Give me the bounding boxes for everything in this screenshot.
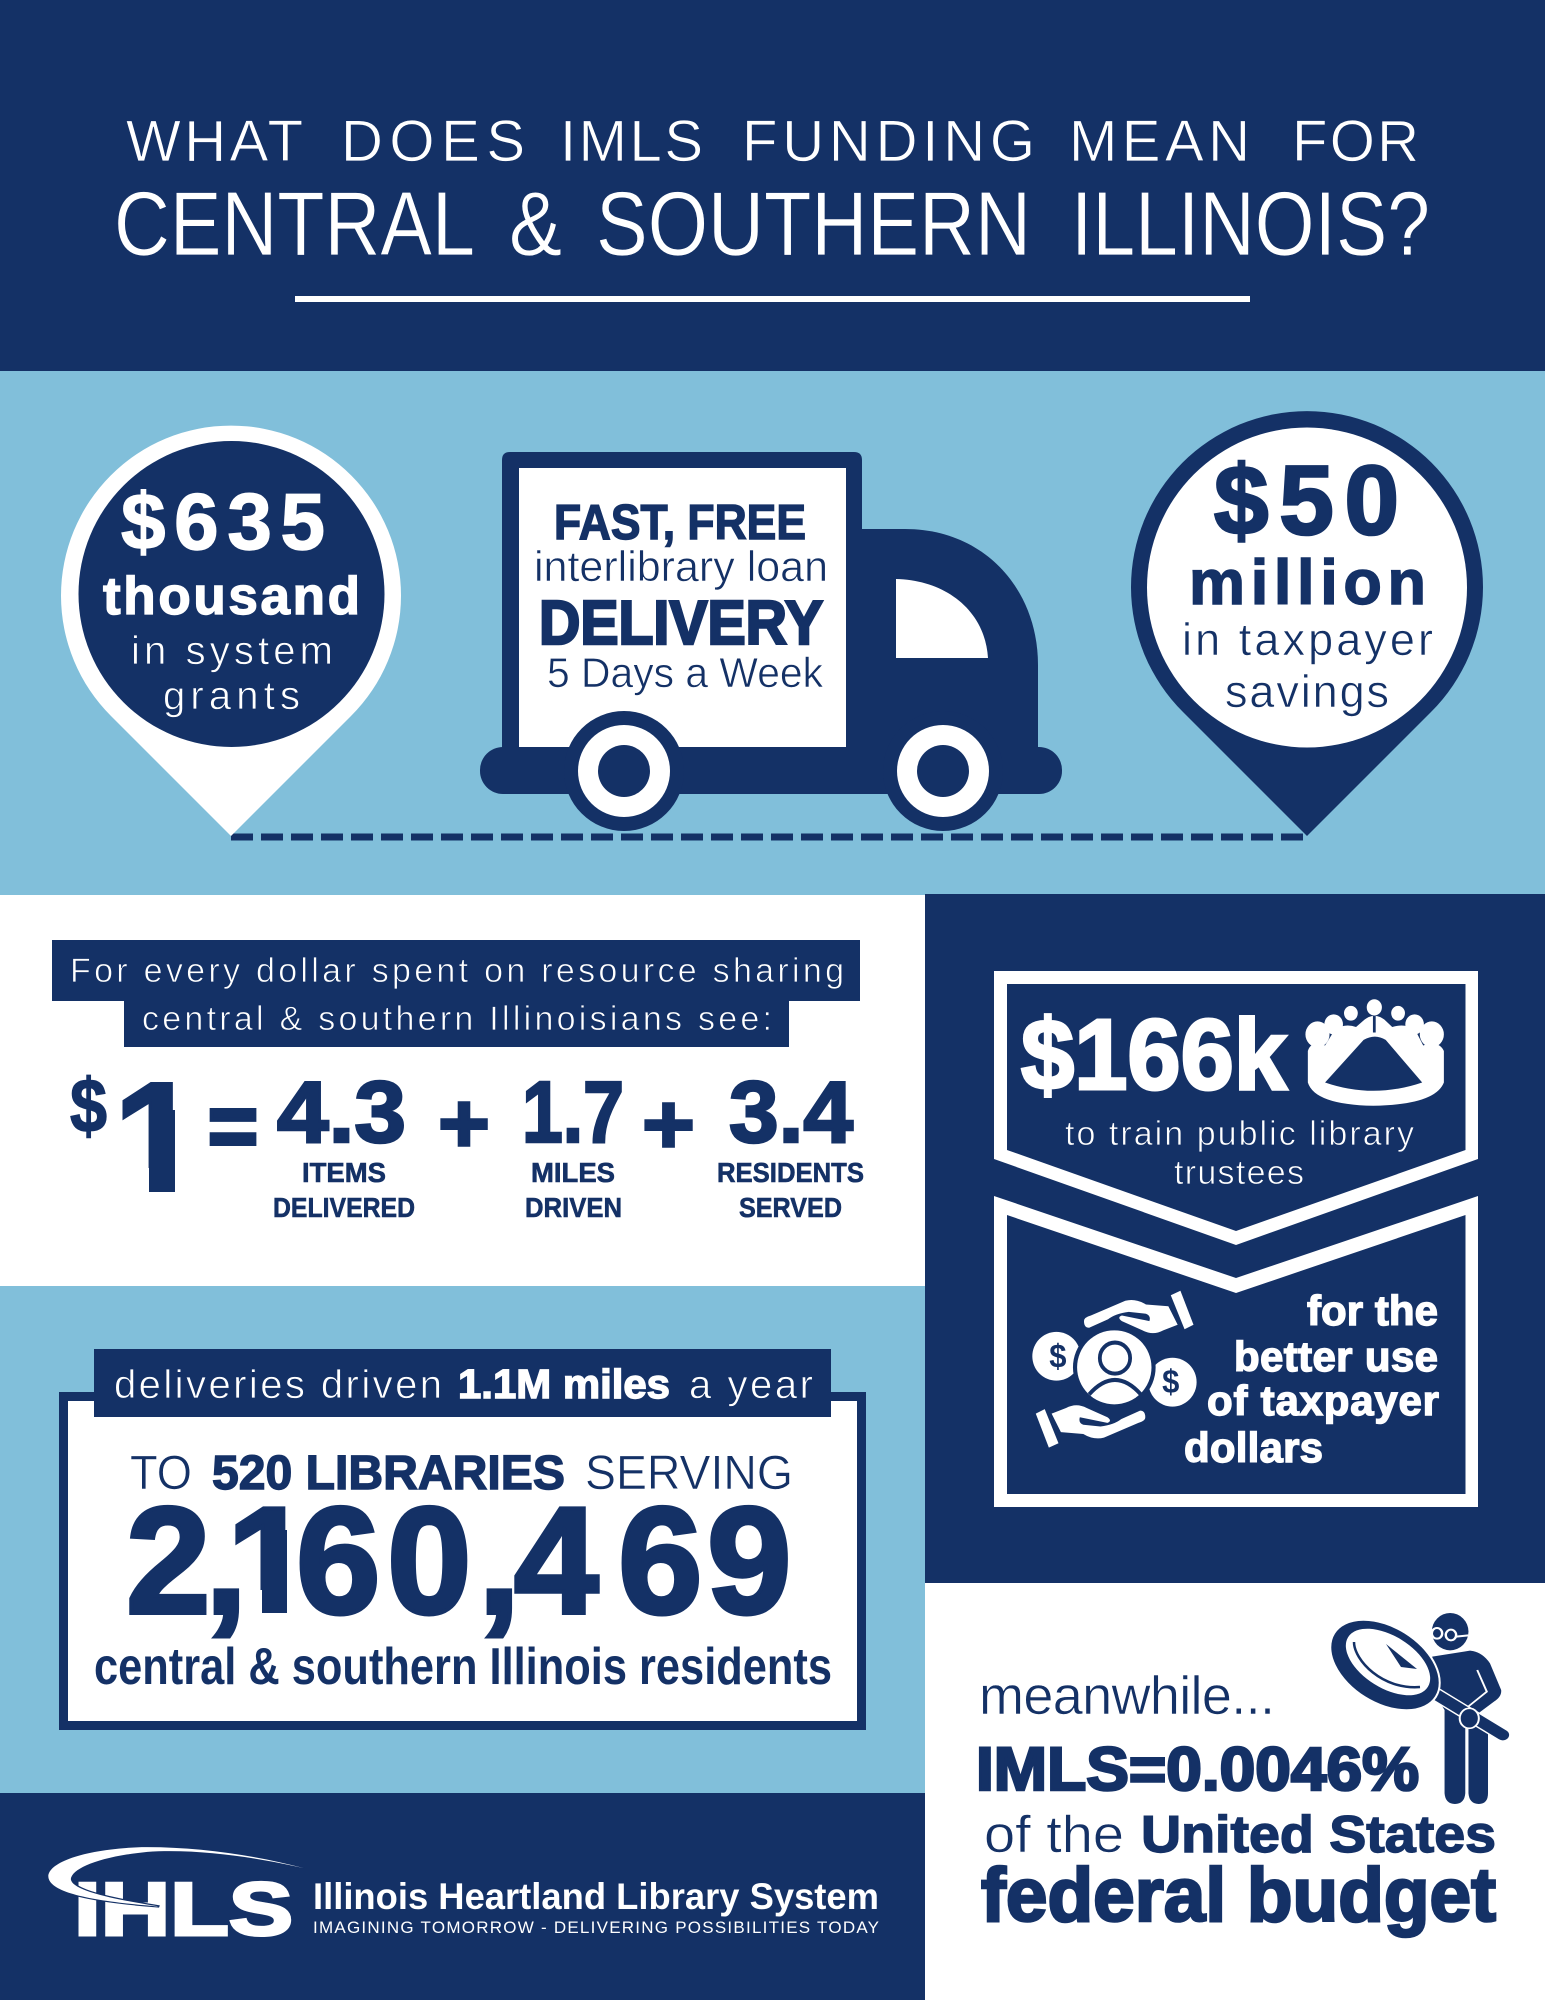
equation: SERVED	[739, 1192, 842, 1223]
text: IMLS share: IMLS=0.0046%	[976, 1735, 1419, 1803]
organisation name: Illinois Heartland Library System	[313, 1876, 879, 1917]
pin: system grants: grants	[163, 674, 300, 718]
banner: resource sharing: For every dollar spent on resource sharing	[70, 952, 844, 990]
residents box: 2,	[126, 1476, 247, 1646]
panel: footer logo	[0, 1793, 925, 2000]
icon: person with magnifying glass	[1314, 1601, 1503, 1804]
residents box: deliveries driven	[114, 1363, 442, 1407]
title line 1	[126, 109, 1419, 174]
truck text: DELIVERY	[539, 589, 823, 658]
title line 2: CENTRAL	[114, 174, 475, 275]
chevron: taxpayer dollars: better use	[1234, 1333, 1438, 1380]
equation: DELIVERED	[273, 1192, 415, 1223]
panel: return on resource sharing	[0, 895, 925, 1286]
truck text: 5 Days a Week	[547, 649, 824, 696]
title line 2: &	[509, 174, 562, 275]
equation: $	[70, 1064, 107, 1149]
equation: DRIVEN	[525, 1192, 622, 1223]
equation: +	[438, 1076, 490, 1170]
chevron: taxpayer dollars: for the	[1307, 1287, 1438, 1334]
residents box: 1	[227, 1476, 312, 1646]
pin: taxpayer savings	[1131, 411, 1483, 836]
icon: hands and coins	[1032, 1291, 1197, 1448]
IHLS logo: IHLS	[74, 1867, 293, 1951]
pin: system grants: in system	[131, 629, 333, 673]
equation: RESIDENTS	[717, 1157, 864, 1188]
truck text: interlibrary loan	[534, 543, 828, 591]
residents box: a year	[689, 1363, 813, 1407]
text: of the United States: United States	[1141, 1806, 1496, 1864]
banner: resource sharing: central & southern Illinoisians see:	[142, 1000, 772, 1038]
residents box	[59, 1349, 866, 1730]
chevron: trustees	[994, 971, 1478, 1245]
truck text	[534, 496, 828, 696]
equation: 3.4	[729, 1064, 853, 1161]
equation: 1	[113, 1050, 201, 1226]
panel: trustee training	[925, 894, 1545, 1583]
pin: system grants	[61, 426, 401, 836]
chevron: trustees: $166k	[1021, 999, 1287, 1111]
title line 2: ILLINOIS?	[1071, 174, 1430, 275]
title line 1: MEAN	[1069, 109, 1250, 174]
text: federal budget: federal budget	[981, 1853, 1496, 1938]
pin: taxpayer savings: savings	[1225, 666, 1389, 717]
icon: hands and coins: $	[1049, 1337, 1067, 1375]
text: of the United States: of the	[984, 1806, 1124, 1864]
residents box: SERVING	[585, 1447, 793, 1500]
truck text: FAST, FREE	[554, 496, 806, 550]
icon: hands and coins: $	[1162, 1363, 1179, 1400]
tagline: IMAGINING TOMORROW - DELIVERING POSSIBILITIES TODAY	[313, 1918, 879, 1937]
title line 1: IMLS	[560, 109, 703, 174]
text: meanwhile: meanwhile...	[979, 1666, 1275, 1726]
panel: header	[0, 0, 1545, 371]
banner: resource sharing	[52, 940, 860, 1047]
pin: system grants: $635	[121, 477, 325, 566]
equation: 4.3	[277, 1064, 406, 1161]
equation: +	[642, 1077, 695, 1171]
chevron: trustees: trustees	[1174, 1154, 1304, 1192]
equation: 1.7	[522, 1064, 624, 1161]
title line 2	[114, 174, 1430, 275]
panel: delivery route	[0, 371, 1545, 895]
panel: libraries served	[0, 1286, 925, 1794]
pin: taxpayer savings: in taxpayer	[1182, 614, 1433, 665]
equation	[70, 1050, 864, 1226]
title line 1: FOR	[1292, 109, 1419, 174]
chevron: taxpayer dollars: dollars	[1184, 1424, 1323, 1471]
residents box: central & southern Illinois residents	[94, 1638, 832, 1696]
equation: ITEMS	[302, 1157, 386, 1188]
residents box: TO	[130, 1447, 192, 1500]
title line 2: SOUTHERN	[596, 174, 1031, 275]
chevron: taxpayer dollars	[994, 1196, 1478, 1507]
residents box: 1.1M miles	[458, 1361, 670, 1407]
title line 1: FUNDING	[742, 109, 1035, 174]
residents box: 520 LIBRARIES	[212, 1447, 565, 1500]
pin: taxpayer savings: million	[1189, 548, 1426, 618]
IHLS logo	[48, 1847, 304, 1951]
equation: MILES	[531, 1157, 615, 1188]
title line 1: DOES	[341, 109, 525, 174]
title line 1: WHAT	[126, 109, 303, 174]
pin: system grants: thousand	[103, 567, 360, 626]
icon: delivery truck	[480, 452, 1062, 831]
pin: taxpayer savings: $50	[1214, 445, 1399, 555]
equation: =	[208, 1077, 258, 1177]
chevron: trustees: to train public library	[1065, 1115, 1414, 1153]
chevron: taxpayer dollars: of taxpayer	[1207, 1377, 1439, 1424]
text: of the United States	[984, 1806, 1496, 1864]
icon: boardroom	[1305, 999, 1444, 1106]
residents box: 60,469	[296, 1476, 792, 1646]
panel: federal budget	[925, 1583, 1545, 2000]
